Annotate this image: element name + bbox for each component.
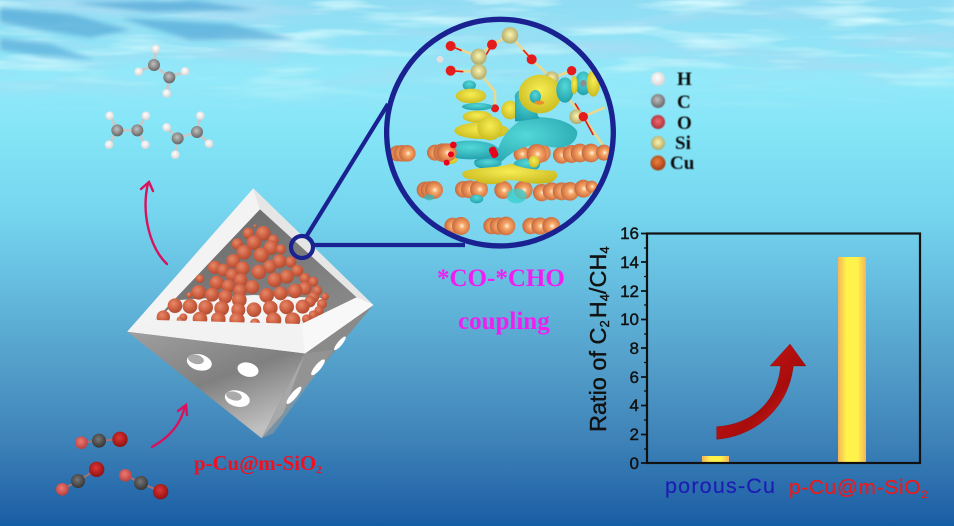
- mechanism text: coupling: [458, 308, 550, 335]
- mechanism text: [437, 265, 565, 335]
- y axis title: 2: [597, 320, 612, 328]
- y axis title: Ratio of C: [585, 328, 611, 432]
- legend: atom types: Si: [675, 133, 691, 154]
- copper nanoparticles: [157, 224, 329, 328]
- y tick labels: 10: [620, 310, 639, 329]
- magnified view connectors: [291, 104, 465, 258]
- label: p-Cu@m-SiO2: p-Cu@m-SiO: [194, 452, 316, 475]
- arrow: red upward curve: [717, 344, 806, 439]
- inner cavity: [155, 209, 357, 324]
- y tick labels: 6: [630, 368, 639, 387]
- legend: atom types: [650, 69, 695, 174]
- isosurfaces cyan and yellow: [424, 70, 600, 203]
- y tick labels: 0: [630, 454, 639, 473]
- y axis title: H: [585, 301, 611, 318]
- arrow: CO2 entering: [152, 405, 187, 447]
- bar chart: ratio of C2H4/CH4: 2: [921, 489, 928, 501]
- arrow: product release: [141, 182, 167, 264]
- bar chart: ratio of C2H4/CH4: [585, 224, 928, 501]
- y tick labels: 2: [630, 425, 639, 444]
- reactant molecules: CO2: [56, 432, 168, 499]
- bars: [702, 456, 729, 463]
- y tick labels: 16: [620, 224, 639, 243]
- rim of the cut opening: [127, 188, 373, 353]
- octahedron catalyst p-Cu@m-SiO2: [127, 188, 373, 438]
- front rim covering particle bases: [127, 297, 373, 353]
- y axis title: 4: [597, 246, 612, 254]
- copper atom rows: [389, 143, 612, 235]
- y tick labels: 12: [620, 282, 639, 301]
- legend: atom types: Cu: [670, 153, 695, 174]
- y axis title: 4: [597, 294, 612, 301]
- mechanism text: *CO-*CHO: [437, 265, 565, 292]
- lower right face: [262, 305, 373, 438]
- legend: atom types: H: [677, 69, 692, 90]
- Si-O framework: [437, 27, 605, 145]
- label: p-Cu@m-SiO2: 2: [316, 464, 322, 476]
- y tick labels: 4: [630, 396, 639, 415]
- pores on shell: [185, 335, 347, 409]
- magnified circle: charge density difference: [387, 19, 613, 246]
- bar chart: ratio of C2H4/CH4: p-Cu@m-SiO: [789, 476, 921, 499]
- lens outline: [387, 19, 613, 246]
- legend: atom types: O: [677, 113, 692, 134]
- y tick labels: 8: [630, 339, 639, 358]
- lens fill: [387, 19, 613, 246]
- legend: atom types: C: [677, 92, 691, 113]
- face creases: [262, 353, 305, 438]
- product molecules: C2H4: [105, 45, 213, 159]
- y tick labels: [620, 224, 639, 473]
- lower left face: [127, 332, 305, 438]
- water surface ripples: [0, 0, 954, 112]
- x labels: porous-Cu: [665, 474, 776, 498]
- y tick labels: 14: [620, 253, 639, 272]
- y axis title: /CH: [585, 254, 611, 294]
- axes and ticks: [641, 234, 920, 463]
